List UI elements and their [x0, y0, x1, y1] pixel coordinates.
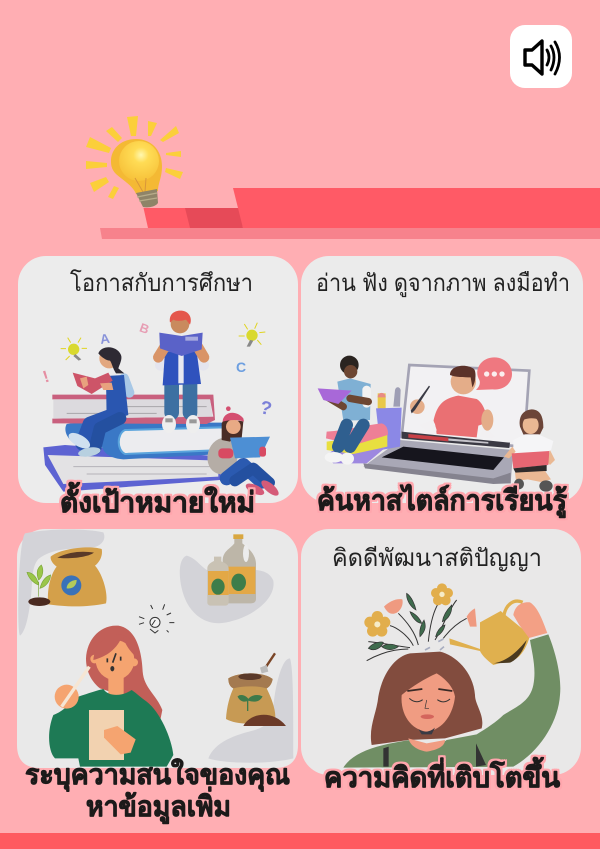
- illustration: online learning: [318, 356, 555, 492]
- card background: [18, 256, 298, 503]
- illustration: readers on books: [40, 311, 281, 498]
- floating letters: C: [236, 359, 246, 375]
- panel: learning style: [301, 256, 583, 518]
- video bar: [402, 432, 510, 448]
- grey blobs: [18, 529, 293, 763]
- middle book: [65, 423, 223, 459]
- watering can: [449, 601, 530, 665]
- stacked clothes: [325, 423, 388, 463]
- illustration: watering the mind: [343, 583, 560, 768]
- card label: ตั้งเป้าหมายใหม่: [60, 481, 255, 518]
- card label: หาข้อมูลเพิ่ม: [86, 786, 231, 824]
- icon: light bulb: [86, 116, 183, 207]
- small compost sack: [226, 653, 286, 726]
- panel: interests: [17, 529, 298, 824]
- floating letters: A: [99, 331, 111, 347]
- student right: [504, 409, 555, 492]
- audio button: [510, 25, 572, 88]
- card heading: โอกาสกับการศึกษา: [70, 269, 253, 297]
- floating letters: ?: [258, 396, 274, 419]
- floating letters: [40, 321, 274, 419]
- girl reading right: [203, 406, 281, 498]
- card label: ระบุความสนใจของคุณ: [25, 758, 290, 792]
- sack with plant: [27, 547, 107, 606]
- header banner shapes: [100, 188, 600, 239]
- card label: ความคิดที่เติบโตขึ้น: [324, 756, 560, 793]
- student left: [318, 356, 371, 465]
- card label: ค้นหาสไตล์การเรียนรู้: [317, 484, 567, 518]
- laptop: [363, 365, 529, 484]
- illustration: woman researching: [18, 529, 293, 767]
- speech bubble: [476, 357, 512, 390]
- panel: growth mindset: [301, 529, 581, 793]
- thought bulb: [139, 604, 174, 633]
- card background: [301, 529, 581, 775]
- top book: [52, 395, 215, 424]
- floating letters: !: [40, 367, 51, 387]
- pen cup: [376, 387, 402, 450]
- card heading: อ่าน ฟัง ดูจากภาพ ลงมือทำ: [316, 270, 570, 298]
- boy reading center: [158, 311, 204, 433]
- bottom book: [43, 445, 223, 492]
- bulb right: [239, 323, 265, 347]
- card background: [301, 256, 583, 503]
- card background: [17, 529, 298, 768]
- card label: [25, 758, 290, 824]
- bulb left: [61, 338, 87, 361]
- floating letters: B: [138, 321, 151, 337]
- organic bottles: [207, 534, 256, 606]
- panel: goals: [18, 256, 298, 518]
- bottom bar: [0, 833, 600, 849]
- woman with notepad: [49, 626, 173, 767]
- girl reading left: [66, 347, 129, 458]
- teacher on screen: [410, 366, 495, 438]
- flowers and leaves: [364, 583, 477, 661]
- woman: [343, 602, 560, 768]
- card heading: คิดดีพัฒนาสติปัญญา: [332, 545, 542, 572]
